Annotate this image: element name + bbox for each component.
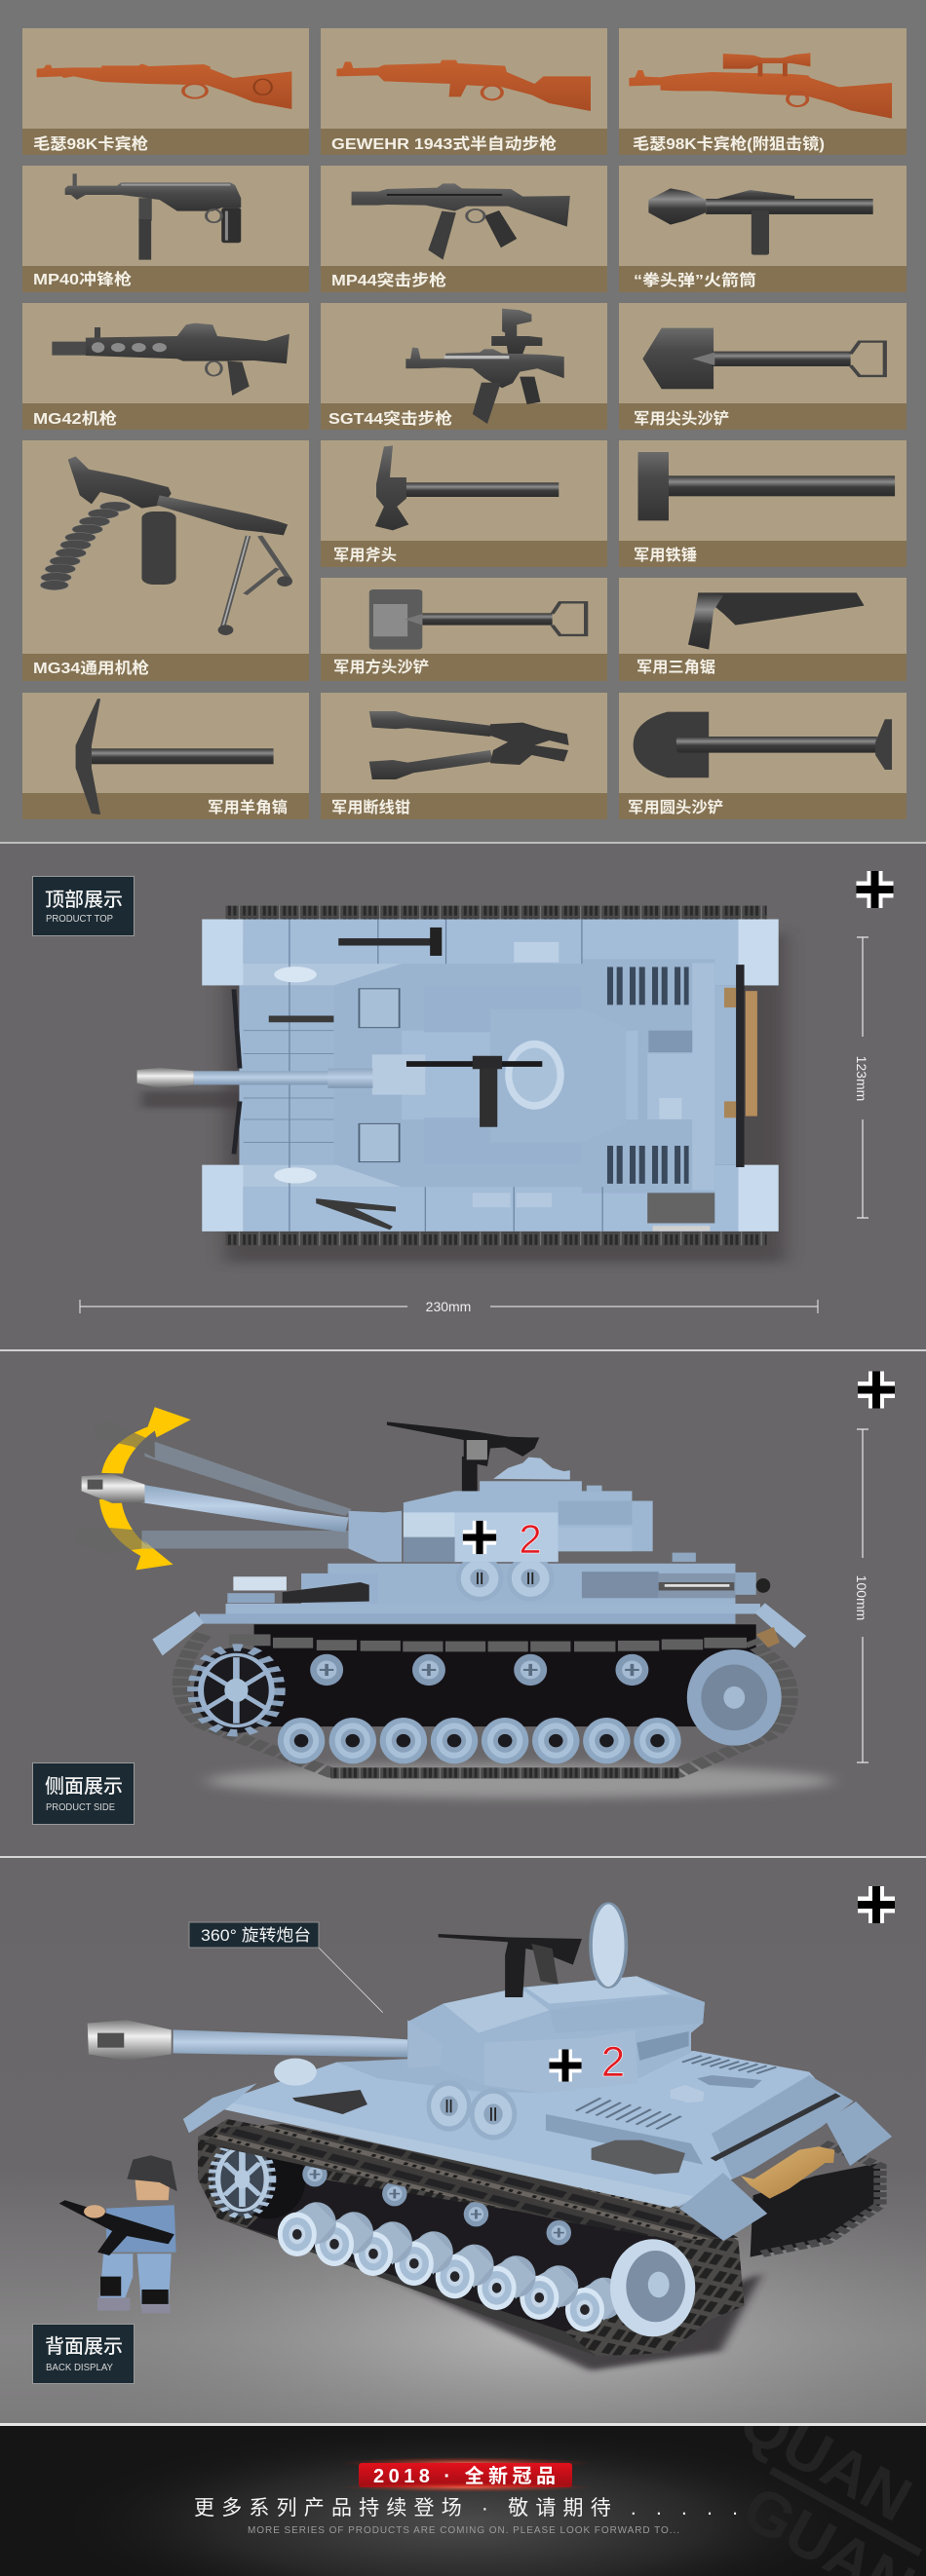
dimension: height 123mm: 123mm: [854, 1056, 869, 1101]
cell: SGT44 assault rifle: SGT44突击步枪: [328, 409, 452, 428]
cell: axe: [321, 440, 607, 567]
callout leader line: [319, 1948, 383, 2013]
cell: square shovel: 军用方头沙铲: [333, 658, 429, 676]
front equipment: [227, 1576, 369, 1603]
tracks: [225, 906, 767, 1245]
section label: product top: 顶部展示: [45, 889, 123, 911]
dimension: height 100mm: [854, 1429, 869, 1762]
hatches: [359, 989, 400, 1162]
panel: back display view: [0, 1856, 926, 2489]
icon: balkenkreuz: [858, 1372, 895, 1409]
cell: Mauser 98K with scope: [619, 28, 907, 155]
panel: footer: [0, 2423, 926, 2576]
cell: MG42 machine gun: MG42机枪: [33, 409, 117, 428]
callout: 360 degree rotating turret: 360° 旋转炮台: [201, 1926, 311, 1945]
hull: [202, 919, 779, 1231]
section label: back display: BACK DISPLAY: [46, 2363, 113, 2373]
section label: product side: PRODUCT SIDE: [46, 1802, 115, 1813]
cell: Mauser 98K with scope: 毛瑟98K卡宾枪(附狙击镜): [633, 134, 825, 153]
sprocket: [212, 2140, 305, 2218]
panel: weapon grid: [22, 28, 907, 819]
tank insignia: cross and number: [549, 2038, 625, 2086]
panel: product top view: [0, 842, 926, 1350]
badge: 2018 new product: [339, 2457, 593, 2492]
cell: round shovel: 军用圆头沙铲: [628, 798, 723, 816]
machine gun and tools: [234, 928, 757, 1231]
cell: MP40 submachine gun: MP40冲锋枪: [33, 270, 132, 288]
cell: Gewehr 1943 semi-automatic rifle: GEWEHR 1943式半自动步枪: [331, 134, 557, 153]
dimension: height 123mm: [854, 937, 869, 1218]
turret: [404, 1458, 653, 1562]
cell: bolt cutters: 军用断线钳: [331, 798, 410, 816]
engine vents: [607, 966, 689, 1184]
cell: Mauser 98K carbine: 毛瑟98K卡宾枪: [33, 134, 148, 153]
watermark: QUAN: [728, 2384, 923, 2535]
icon: balkenkreuz: [856, 871, 893, 908]
cell: Mauser 98K carbine: [22, 28, 309, 155]
icon: balkenkreuz: [858, 1886, 895, 1923]
main gun: [88, 2020, 444, 2068]
section label: back display: [33, 2325, 135, 2383]
cell: MP44 assault rifle: [321, 166, 607, 292]
badge: 2018 new product: 2018 · 全新冠品: [373, 2464, 556, 2487]
cell: Panzerfaust rocket launcher: “拳头弹”火箭筒: [634, 271, 756, 289]
cell: square shovel: [321, 578, 607, 681]
cell: Panzerfaust rocket launcher: [619, 166, 907, 292]
section label: product side: 侧面展示: [45, 1775, 123, 1798]
subheading: MORE SERIES OF PRODUCTS ARE COMING ON. PLEASE LOOK FORWARD TO...: [248, 2525, 679, 2536]
soldier minifigure: [59, 2155, 177, 2313]
cell: pointed shovel: [619, 303, 907, 430]
cell: pointed shovel: 军用尖头沙铲: [634, 409, 729, 428]
cell: round shovel: [619, 693, 907, 819]
cell: MG34 general purpose machine gun: [22, 440, 309, 681]
icon: yellow rotation arrow: [99, 1407, 191, 1571]
callout: 360 degree rotating turret: [189, 1922, 319, 1948]
cell: triangular saw: [619, 578, 907, 681]
panel: weapons background: [0, 0, 926, 842]
cell: pickaxe: [22, 693, 309, 819]
cell: MP44 assault rifle: MP44突击步枪: [331, 271, 446, 289]
hull: [183, 2051, 892, 2241]
turret: [336, 1976, 705, 2140]
panel: product side view: [0, 1349, 926, 1857]
cell: MG34 general purpose machine gun: MG34通用机枪: [33, 659, 149, 677]
near track: [198, 2119, 745, 2356]
return rollers and road wheels: [278, 2162, 695, 2336]
running gear: [181, 1624, 790, 1778]
main gun: [82, 1474, 402, 1562]
cell: MG42 machine gun: [22, 303, 309, 430]
machine gun: [387, 1421, 539, 1491]
tank insignia: cross and number: 2: [601, 2038, 625, 2086]
section label: product side: [33, 1763, 135, 1824]
cell: MP40 submachine gun: [22, 166, 309, 292]
cell: axe: 军用斧头: [333, 546, 397, 564]
cell: pickaxe: 军用羊角镐: [208, 798, 288, 816]
track top row: [202, 2124, 739, 2241]
section label: back display: 背面展示: [45, 2335, 123, 2358]
tank insignia: cross and number: [463, 1516, 542, 1562]
watermark: [745, 2426, 922, 2576]
hatch and machine gun: [439, 1903, 626, 1997]
section label: product top: PRODUCT TOP: [46, 914, 113, 925]
ghost barrels: [77, 1421, 352, 1554]
turret: [402, 986, 692, 1164]
cell: sledgehammer: 军用铁锤: [634, 547, 697, 564]
cell: sledgehammer: [619, 440, 907, 567]
dimension: height 100mm: 100mm: [854, 1575, 869, 1620]
far track and rear block: [751, 2143, 880, 2257]
headline: 更多系列产品持续登场 · 敬请期待 . . . . .: [194, 2497, 738, 2519]
section label: product top: [33, 877, 135, 935]
hull: [152, 1553, 806, 1655]
dimension: length 230mm: 230mm: [426, 1299, 471, 1314]
cell: triangular saw: 军用三角锯: [637, 658, 715, 676]
tank insignia: cross and number: 2: [519, 1516, 542, 1562]
cell: bolt cutters: [321, 693, 607, 819]
main gun: [137, 1054, 425, 1095]
dimension: length 230mm: [80, 1299, 818, 1314]
cell: SGT44 assault rifle: [321, 303, 607, 430]
cell: Gewehr 1943 semi-automatic rifle: [321, 28, 607, 155]
